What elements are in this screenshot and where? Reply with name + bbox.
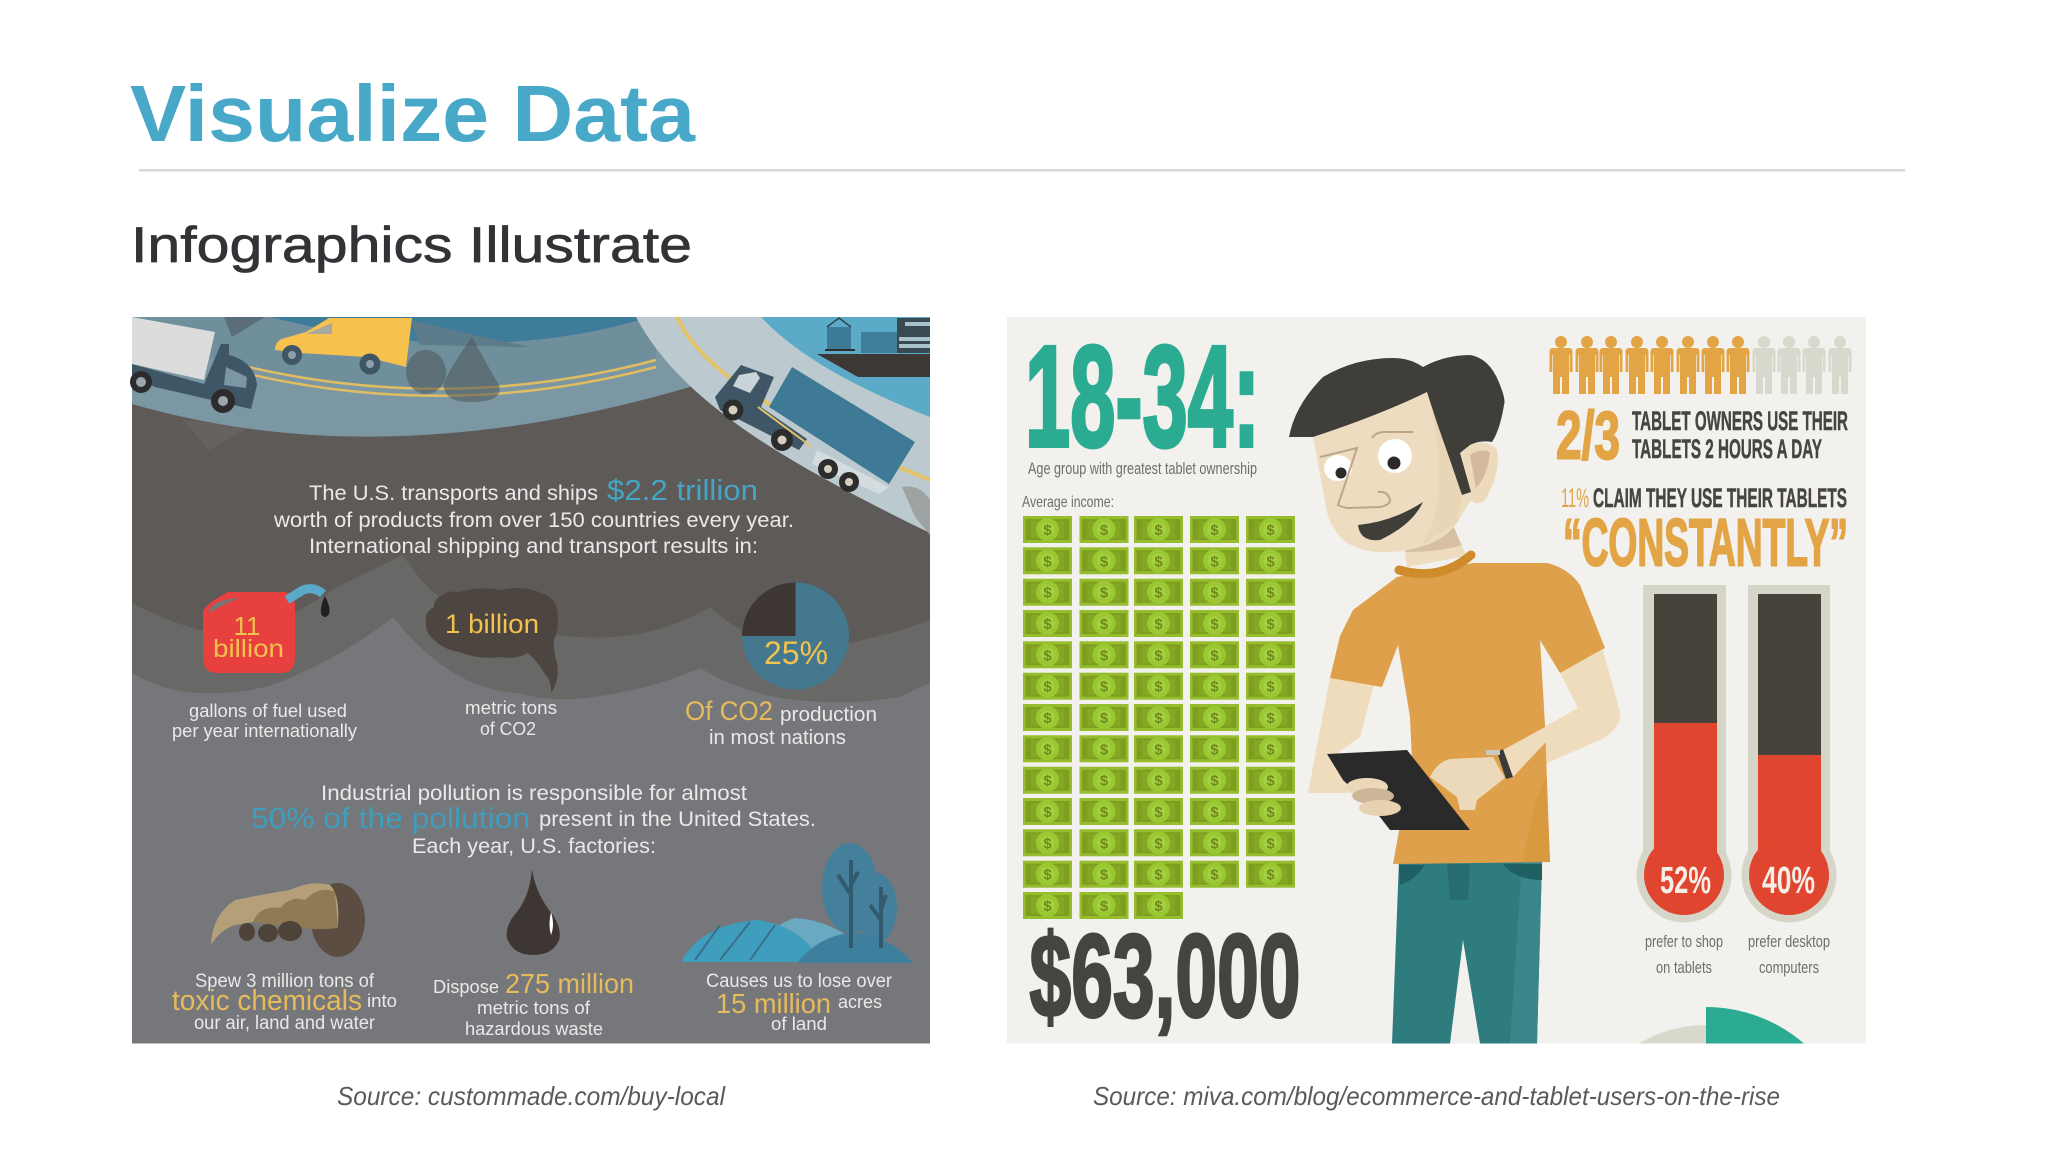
curved highway and water [636,317,930,535]
pictogram: dollar bills: $$$ [1043,898,1163,915]
text block: industrial pollution: 50% of the pollution [251,803,530,835]
caption: toxic chemicals [172,971,397,1034]
panel background [132,317,930,1044]
illustration: man with tablet [1289,355,1620,1044]
stat: constantly: CLAIM THEY USE THEIR TABLETS [1593,483,1847,513]
mouth [1358,502,1423,540]
road [132,317,700,437]
caption: hazardous waste: Dispose [433,977,499,997]
caption: CO2 tons [465,698,557,739]
redraw right arm over shirt [1503,708,1578,778]
caption: acres of land: of land [771,1014,827,1034]
subtitle: Infographics Illustrate [131,217,692,273]
shirt [1330,563,1605,864]
thermometer: 40 percent: 40% [1762,860,1815,902]
stat: two thirds: 2/3 [1556,398,1620,474]
text block: shipping intro: The U.S. transports and ships [309,482,598,505]
stat: constantly: 11% [1561,483,1589,513]
caption: CO2 production: production [780,704,877,726]
stat: income amount: $63,000 [1030,910,1300,1042]
title rule [139,169,1905,172]
caption: hazardous waste: 275 million [505,968,634,999]
eyes [1324,439,1412,481]
pie chart: 25 percent: 25% [764,635,828,671]
stat: constantly [1561,483,1848,580]
face [1313,392,1472,552]
icon: CO2 cloud: 1 billion [445,609,539,639]
pictogram: dollar bills: $$$$$ [1043,522,1275,539]
label: average income: Average income: [1022,494,1114,511]
caption: hazardous waste [433,968,634,1039]
left arm [1308,678,1374,793]
icon: factory smoke [211,883,365,957]
stat: two thirds: TABLETS 2 HOURS A DAY [1632,434,1822,464]
text block: industrial pollution [251,782,816,858]
caption: CO2 tons: metric tons [465,698,557,718]
tablet [1327,750,1470,830]
caption: CO2 tons: of CO2 [480,719,536,739]
icon: blue truck [715,365,915,494]
panel: shipping and pollution infographic [130,317,930,1044]
collar [1399,555,1471,574]
pictogram: dollar bills: $$$$$ [1043,741,1275,758]
icon: red fuel can: billion [213,635,284,663]
pictogram: dollar bills: $$$$$ [1043,835,1275,852]
pictogram: dollar bills [1023,516,1295,919]
right arm [1503,650,1620,778]
smog mountain layers [132,420,930,1044]
pants [1392,860,1542,1044]
neck [1405,525,1466,567]
icon: farmland and trees [681,843,913,963]
caption: fuel gallons: gallons of fuel used [189,701,347,721]
source: right image: Source: miva.com/blog/ecommerce-and-tablet-users-on-the-rise [1093,1081,1780,1111]
thermometer: 52 percent: on tablets [1656,958,1712,977]
icon: road smoke [406,337,500,402]
pictogram: dollar bills: $$$$$ [1043,585,1275,602]
nose and brow lines [1320,432,1413,508]
pictogram: dollar bills: $$$$$ [1043,616,1275,633]
pictogram: dollar bills: $$$$$ [1043,867,1275,884]
title: Visualize Data [130,69,696,158]
panel background [1007,317,1866,1044]
text block: shipping intro [273,475,794,558]
caption: toxic chemicals: toxic chemicals [172,985,362,1017]
pictogram: dollar bills: $$$$$ [1043,773,1275,790]
icon: white truck [130,317,257,413]
caption: hazardous waste: metric tons of [477,998,591,1018]
text block: industrial pollution: Industrial pollution is responsible for almost [321,782,747,805]
ear [1462,443,1498,503]
caption: fuel gallons [172,701,357,741]
caption: toxic chemicals: into [367,991,397,1011]
stat: two thirds [1556,398,1848,474]
icon: CO2 cloud [426,588,558,693]
thermometer: 40 percent: computers [1759,958,1819,977]
caption: hazardous waste: hazardous waste [465,1019,603,1039]
caption: toxic chemicals: Spew 3 million tons of [195,971,375,992]
left hand [1346,778,1401,816]
icon: oil drop [507,869,560,955]
caption: CO2 production: in most nations [709,727,846,749]
thermometer: 40 percent: prefer desktop [1748,932,1830,951]
text block: shipping intro: $2.2 trillion [607,475,758,507]
text block: industrial pollution: Each year, U.S. factories: [412,835,656,858]
icon: red fuel can: 11 [234,611,260,641]
caption: acres of land: 15 million [716,988,831,1019]
pictogram: dollar bills: $$$$$ [1043,710,1275,727]
panel: tablet ownership infographic [1007,316,1866,1044]
icon: yellow van [275,318,412,374]
cropped pie chart [1639,1007,1804,1044]
stat: two thirds: TABLET OWNERS USE THEIR [1632,406,1848,436]
cheek shade [1420,392,1462,547]
thermometer: 52 percent [1636,585,1732,977]
heading: age range: 18-34: [1025,316,1260,477]
pictogram: dollar bills: $$$$$ [1043,679,1275,696]
icon: red fuel can [203,589,330,673]
pictogram: dollar bills: $$$$$ [1043,804,1275,821]
caption: CO2 production: Of CO2 [685,696,773,726]
text block: industrial pollution: present in the United States. [539,808,816,831]
caption: acres of land: Causes us to lose over [706,971,893,992]
pictogram: dollar bills: $$$$$ [1043,553,1275,570]
source: left image: Source: custommade.com/buy-local [337,1081,726,1111]
hair [1289,355,1504,495]
icon: cargo ship [817,318,930,377]
caption: acres of land [706,971,893,1034]
pictogram: dollar bills: $$$$$ [1043,647,1275,664]
text block: shipping intro: International shipping and transport results in: [309,535,758,558]
caption: CO2 production [685,696,877,749]
caption: age group: Age group with greatest tablet ownership [1028,459,1257,478]
text block: shipping intro: worth of products from over 150 countries every year. [273,509,794,532]
thermometer: 52 percent: 52% [1660,860,1711,902]
thermometer: 52 percent: prefer to shop [1645,932,1723,951]
pie chart: 25 percent [742,582,849,690]
watch [1486,749,1513,779]
pictogram: people two thirds [1550,336,1852,394]
caption: fuel gallons: per year internationally [172,721,357,741]
caption: toxic chemicals: our air, land and water [194,1013,376,1034]
thermometer: 40 percent [1742,585,1836,977]
caption: acres of land: acres [838,992,882,1012]
shirt shade [1522,775,1550,862]
right hand [1430,757,1505,810]
